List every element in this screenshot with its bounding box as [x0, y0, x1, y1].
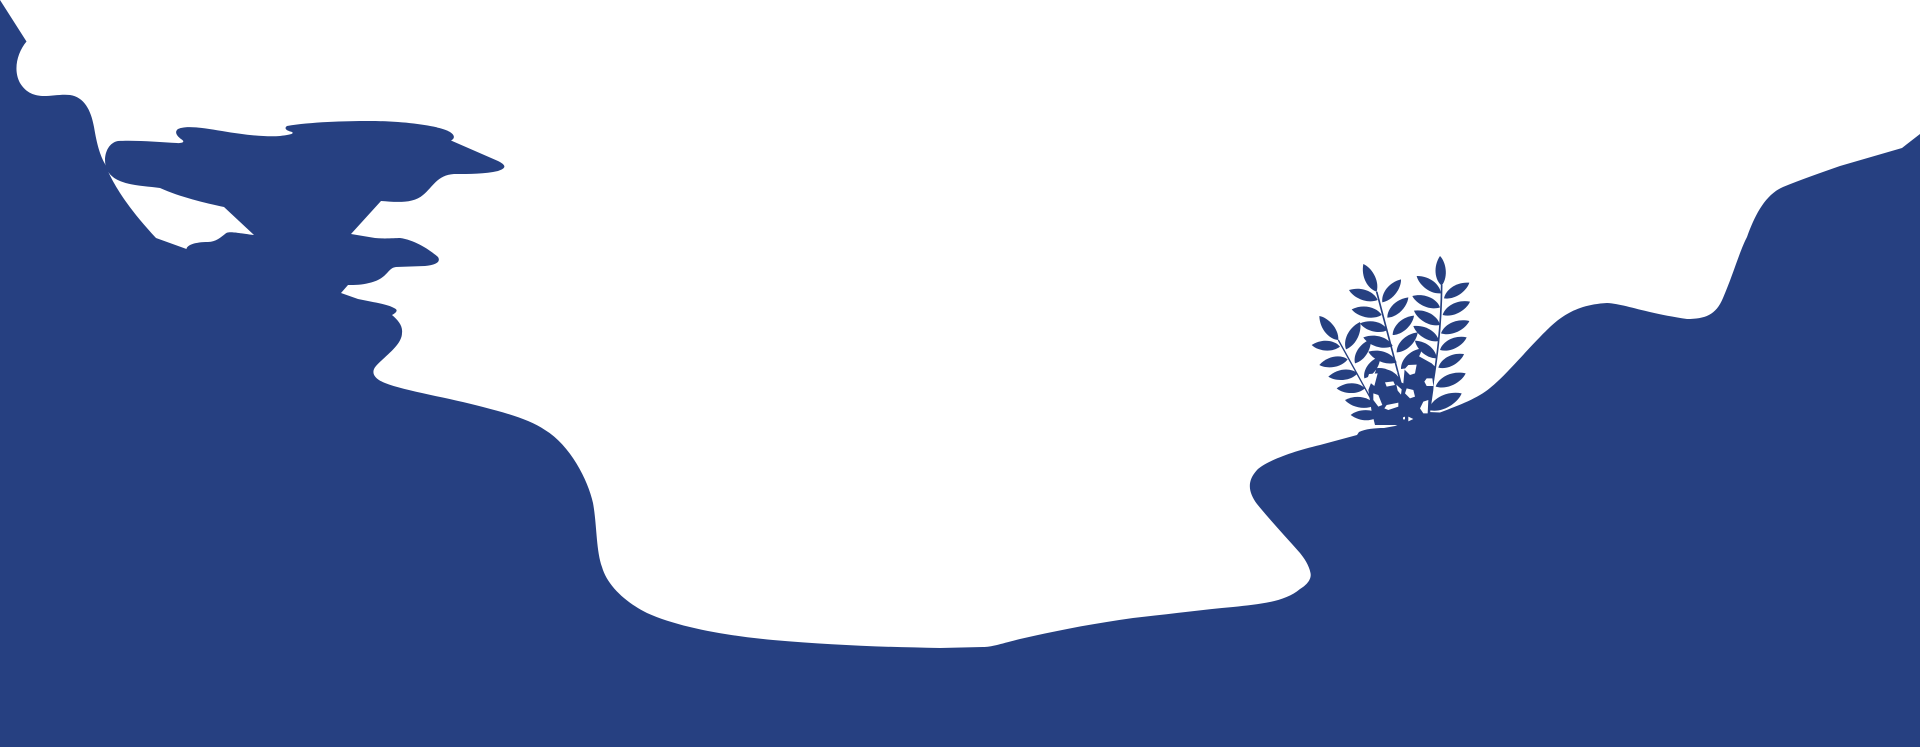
right stem leaves: [1409, 256, 1472, 417]
left stem leaves: [1311, 313, 1384, 420]
plant: three leafy stems: [1311, 256, 1472, 425]
plant base: dense foliage with gaps: [1367, 355, 1435, 425]
middle stem leaves: [1347, 262, 1425, 412]
